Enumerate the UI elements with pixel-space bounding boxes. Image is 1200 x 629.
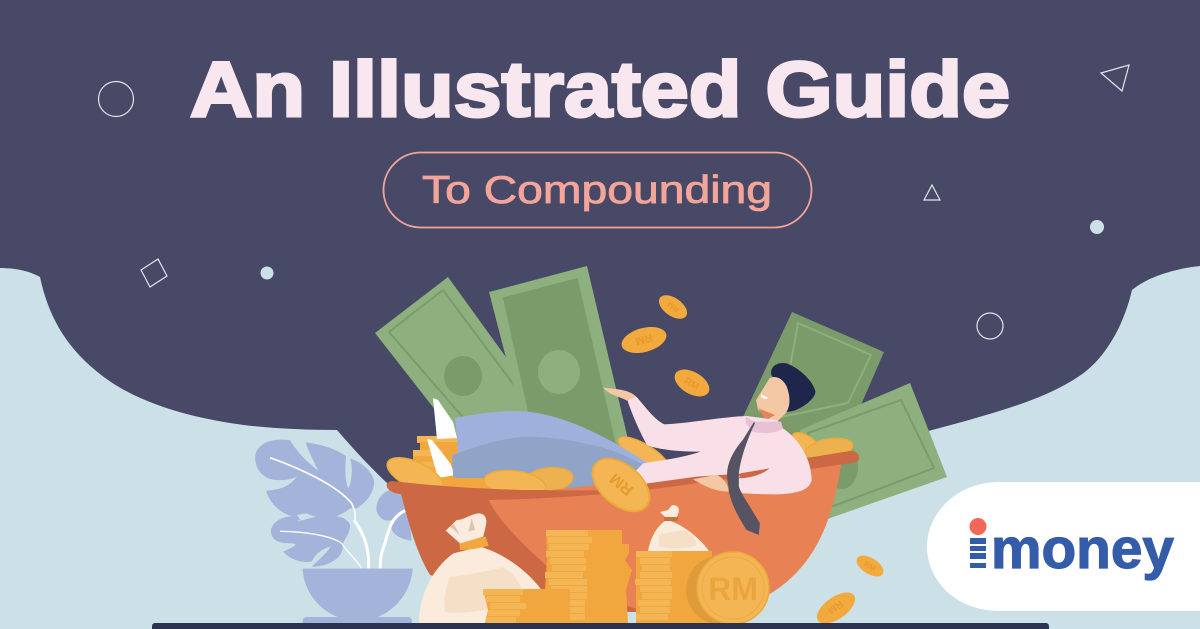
coin [812, 586, 860, 629]
coins behind legs [413, 436, 500, 490]
back leg [455, 411, 655, 490]
banknote: back right [743, 312, 884, 470]
coin in bowl: RM [607, 469, 637, 498]
coin stacks [483, 530, 712, 623]
banknotes [375, 266, 947, 522]
falling coins [583, 290, 887, 629]
logo wordmark: money [991, 517, 1174, 581]
coin: RM [634, 331, 654, 347]
coin behind arm [614, 431, 672, 475]
coin [619, 322, 669, 358]
bowl rim [387, 451, 859, 500]
small money bag [648, 505, 709, 551]
tie [727, 422, 760, 535]
coin: RM [665, 299, 681, 314]
subtitle pill: To Compounding [422, 169, 772, 212]
icon: potted plant [255, 440, 413, 627]
banknote: far left [375, 277, 555, 480]
banknote: centre left [489, 266, 640, 490]
coin [853, 551, 887, 581]
bowl shadow side [400, 490, 640, 612]
coin stack: low [483, 589, 570, 623]
bottom bar [152, 623, 1049, 629]
logo stripes [970, 538, 986, 568]
shirt [627, 397, 812, 494]
coin [655, 290, 691, 324]
sleeve accent and hand [739, 468, 769, 478]
coin: RM [682, 376, 701, 393]
banknote: front right [800, 383, 947, 522]
large RM coin [686, 552, 769, 625]
large RM coin: RM [708, 571, 758, 607]
hair [771, 363, 815, 412]
man's legs and shoes [427, 398, 655, 495]
front leg [452, 437, 650, 495]
subtitle pill [384, 152, 812, 228]
front shoe [427, 439, 455, 478]
coins in bowl [382, 428, 854, 501]
decorative outlined shapes [98, 65, 1129, 339]
bowl body [487, 458, 842, 610]
large money bag [419, 513, 547, 623]
face [756, 377, 789, 423]
coin in bowl [583, 448, 659, 522]
coin [670, 364, 714, 402]
title: An Illustrated Guide [190, 45, 1010, 133]
coin stack: tall [545, 530, 632, 623]
back shoe [433, 398, 457, 439]
bowl [387, 451, 859, 612]
logo dot [970, 518, 986, 535]
coin stack: right [635, 551, 712, 623]
coin: RM [826, 598, 845, 616]
logo badge [927, 482, 1200, 611]
decorative dots [260, 220, 1104, 280]
coin: RM [862, 559, 878, 574]
man [603, 363, 815, 535]
